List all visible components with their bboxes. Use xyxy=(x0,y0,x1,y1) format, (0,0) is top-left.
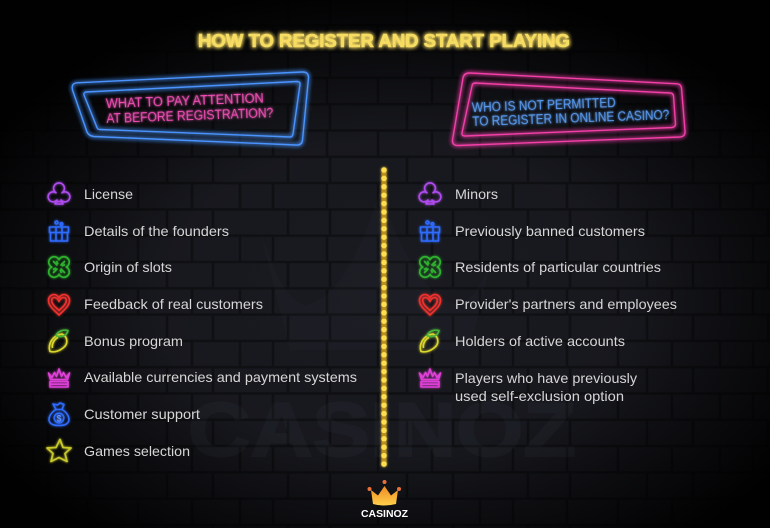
logo: Casinoz xyxy=(361,480,409,520)
icon: gift xyxy=(420,221,440,241)
blue question heading xyxy=(472,93,669,129)
item: Details of the founders xyxy=(84,223,229,239)
panel: left neon sign xyxy=(72,72,309,145)
icon: club xyxy=(419,183,441,204)
item: Customer support xyxy=(84,406,200,422)
wordmark: CASINOZ xyxy=(361,508,409,520)
item: Residents of particular countries xyxy=(455,259,661,275)
pink question heading xyxy=(106,90,274,126)
pink question heading: WHAT TO PAY ATTENTION xyxy=(106,90,264,111)
icon: crown xyxy=(48,369,70,387)
item: Previously banned customers xyxy=(455,223,645,239)
icon: heart xyxy=(420,294,440,315)
panel: right neon sign xyxy=(452,73,685,146)
item: License xyxy=(84,186,133,202)
icon: clover xyxy=(49,257,69,277)
item: Bonus program xyxy=(84,333,183,349)
item: Holders of active accounts xyxy=(455,333,625,349)
icon: club xyxy=(48,183,70,204)
panel: right list xyxy=(419,183,677,404)
watermark: crown and wordmark: CASINOZ xyxy=(188,388,576,473)
icon: crown xyxy=(368,480,401,506)
item xyxy=(455,370,637,404)
icon: star xyxy=(47,440,71,462)
item: Provider's partners and employees xyxy=(455,296,677,312)
item: Origin of slots xyxy=(84,259,172,275)
pink neon frame xyxy=(452,73,685,146)
title: HOW TO REGISTER AND START PLAYING xyxy=(198,30,570,51)
dotted neon divider xyxy=(382,170,386,466)
item: Minors xyxy=(455,186,498,202)
blue neon frame xyxy=(72,72,309,145)
blue question heading: WHO IS NOT PERMITTED xyxy=(472,95,616,115)
item: Players who have previously xyxy=(455,370,637,386)
blue question heading: TO REGISTER IN ONLINE CASINO? xyxy=(472,107,669,129)
pink question heading: AT BEFORE REGISTRATION? xyxy=(106,105,274,126)
item: Feedback of real customers xyxy=(84,296,263,312)
icon: lemon xyxy=(49,330,68,352)
icon: gift xyxy=(50,221,68,241)
icon: lemon xyxy=(420,330,439,352)
icon: crown xyxy=(420,369,440,387)
panel: left list xyxy=(47,183,357,462)
item: used self-exclusion option xyxy=(455,388,624,404)
icon: clover xyxy=(420,257,440,277)
icon: heart xyxy=(48,294,70,315)
item: Games selection xyxy=(84,443,190,459)
item: Available currencies and payment systems xyxy=(84,369,357,385)
icon: money bag xyxy=(49,403,69,426)
